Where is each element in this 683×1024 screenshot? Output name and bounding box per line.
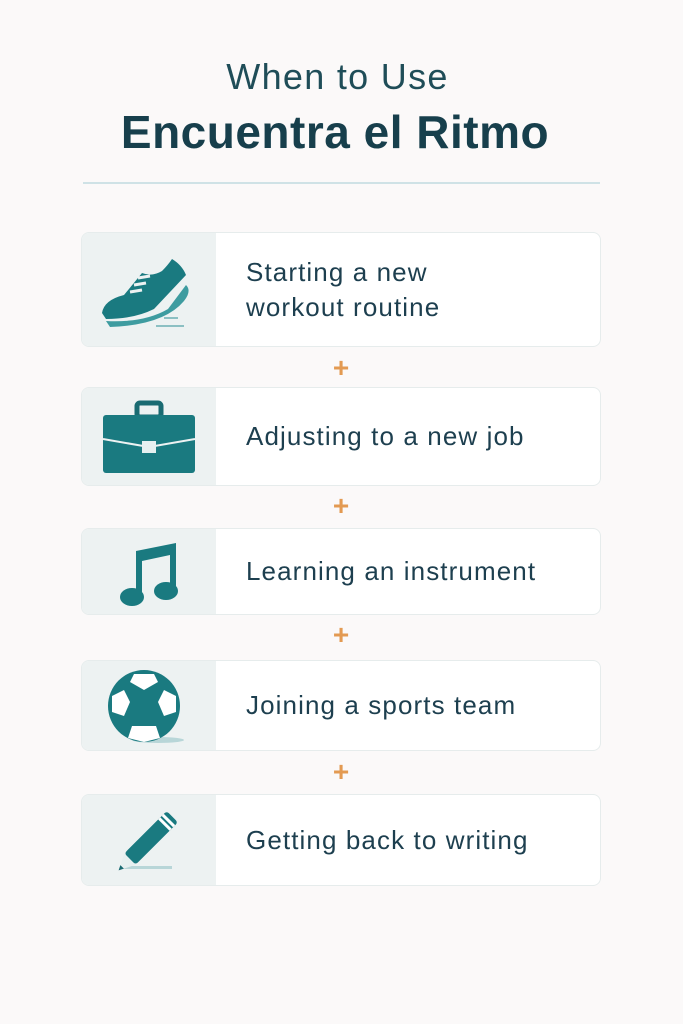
card: instrument bbox=[81, 528, 601, 615]
icon: soccer ball bbox=[82, 661, 216, 750]
plus: + bbox=[333, 490, 349, 521]
plus: + bbox=[333, 352, 349, 383]
card: writing bbox=[81, 794, 601, 886]
text: Learning an instrument bbox=[246, 556, 536, 586]
text: Getting back to writing bbox=[246, 824, 529, 854]
icon: shoe bbox=[82, 233, 216, 346]
plus: + bbox=[333, 619, 349, 650]
icon: music note bbox=[82, 529, 216, 614]
title: When to Use bbox=[226, 56, 449, 97]
icon: briefcase bbox=[82, 388, 216, 485]
heading: Encuentra el Ritmo bbox=[121, 106, 549, 158]
text bbox=[246, 256, 440, 322]
text: Joining a sports team bbox=[246, 690, 516, 720]
plus: + bbox=[333, 756, 349, 787]
card: sports bbox=[81, 660, 601, 751]
text: workout routine bbox=[246, 292, 440, 322]
card: workout bbox=[81, 232, 601, 347]
text: Adjusting to a new job bbox=[246, 421, 525, 451]
icon: pencil bbox=[82, 795, 216, 885]
text: Starting a new bbox=[246, 256, 428, 286]
card: job bbox=[81, 387, 601, 486]
